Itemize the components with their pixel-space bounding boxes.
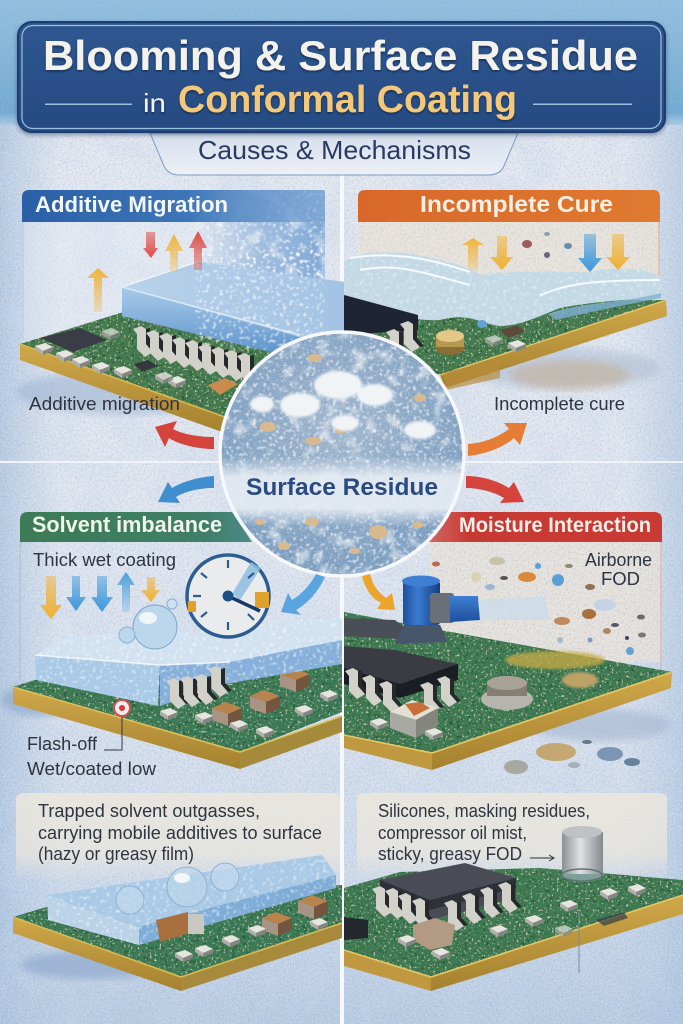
circle label: Surface Residue: [246, 474, 438, 501]
subtitle tab: [150, 133, 518, 175]
note panel: silicones: [357, 793, 667, 880]
title banner: [18, 22, 665, 132]
panel header: Moisture Interaction: [459, 513, 651, 537]
label: airborne FOD: [585, 549, 652, 589]
note text: [38, 801, 322, 864]
central circle: surface residue: [220, 332, 464, 576]
SMD parts: [156, 895, 328, 962]
top blue band: [0, 0, 683, 125]
coating block with bubbles: [47, 855, 337, 945]
SMD parts: [344, 884, 646, 973]
panel header: [420, 512, 662, 542]
note text: [378, 801, 590, 864]
SMD parts and button cap: [370, 676, 533, 740]
small airborne particles: [522, 232, 572, 258]
label: flash-off: Flash-off: [27, 733, 98, 754]
label: airborne FOD: Airborne: [585, 549, 652, 570]
gold capacitor: [435, 325, 526, 355]
panel header: [358, 190, 660, 222]
arrows: additive up and down: [87, 231, 207, 312]
arrow: blue left curved: [158, 476, 214, 503]
arrow: red right curved: [466, 476, 524, 503]
label: incomplete cure: Incomplete cure: [494, 393, 625, 414]
PCB board: [0, 660, 342, 769]
icon: bubble: [119, 599, 177, 649]
panel header: [20, 512, 252, 542]
PCB board: [344, 300, 667, 390]
icon: timer gauge: [187, 555, 269, 637]
title line 1: Blooming & Surface Residue: [43, 32, 638, 79]
panel header: Solvent imbalance: [32, 512, 222, 537]
label: airborne FOD: FOD: [601, 568, 640, 589]
label: wet/coated low: Wet/coated low: [27, 758, 157, 779]
IC leads: [133, 326, 261, 384]
black IC: [372, 863, 522, 931]
icon: silver capacitor: [562, 826, 604, 882]
ground debris: [504, 740, 640, 774]
black IC: [344, 295, 424, 360]
title line 2: in: [143, 88, 166, 118]
uneven wet coating: [344, 252, 661, 328]
panel: solvent imbalance: [0, 512, 345, 779]
board: bottom left: [13, 855, 342, 991]
icon: blue spray nozzle: [395, 576, 550, 644]
panel: additive migration: [15, 190, 345, 433]
airborne particles: [432, 557, 646, 655]
label: additive migration: Additive migration: [29, 393, 180, 414]
arrows: cure up and down: [462, 234, 630, 272]
arrow: gold lower curved: [362, 574, 395, 610]
panel: moisture interaction: [344, 512, 672, 774]
dark IC: [344, 618, 461, 713]
icon: target marker: [104, 700, 130, 750]
title line 2: Conformal Coating: [178, 79, 517, 121]
wet coating block: [30, 615, 345, 710]
note text: sticky, greasy FOD: [378, 844, 522, 864]
note text: carrying mobile additives to surface: [38, 823, 322, 843]
note text: Trapped solvent outgasses,: [38, 801, 260, 821]
IC leads: [166, 666, 232, 709]
panel header: Incomplete Cure: [420, 191, 613, 217]
arrow: orange right curved: [468, 423, 527, 456]
arrow: blue lower curved: [281, 574, 325, 615]
note text: compressor oil mist,: [378, 823, 527, 843]
arrows: solvent: [40, 572, 160, 619]
panel: incomplete cure: [344, 190, 667, 414]
note text: (hazy or greasy film): [38, 844, 194, 864]
coating block: [122, 250, 345, 352]
panel header: Additive Migration: [35, 192, 228, 217]
PCB board: [344, 612, 672, 770]
note panel: trapped solvent: [16, 793, 340, 880]
arrow: red left curved: [155, 421, 214, 449]
panel haze: residue cloud: [195, 190, 325, 350]
PCB board: [15, 310, 340, 433]
label: thick wet coating: Thick wet coating: [33, 549, 176, 570]
subtitle text: Causes & Mechanisms: [198, 135, 471, 165]
panel header: [22, 190, 325, 222]
note text: Silicones, masking residues,: [378, 801, 590, 821]
board: bottom right: [344, 826, 683, 991]
